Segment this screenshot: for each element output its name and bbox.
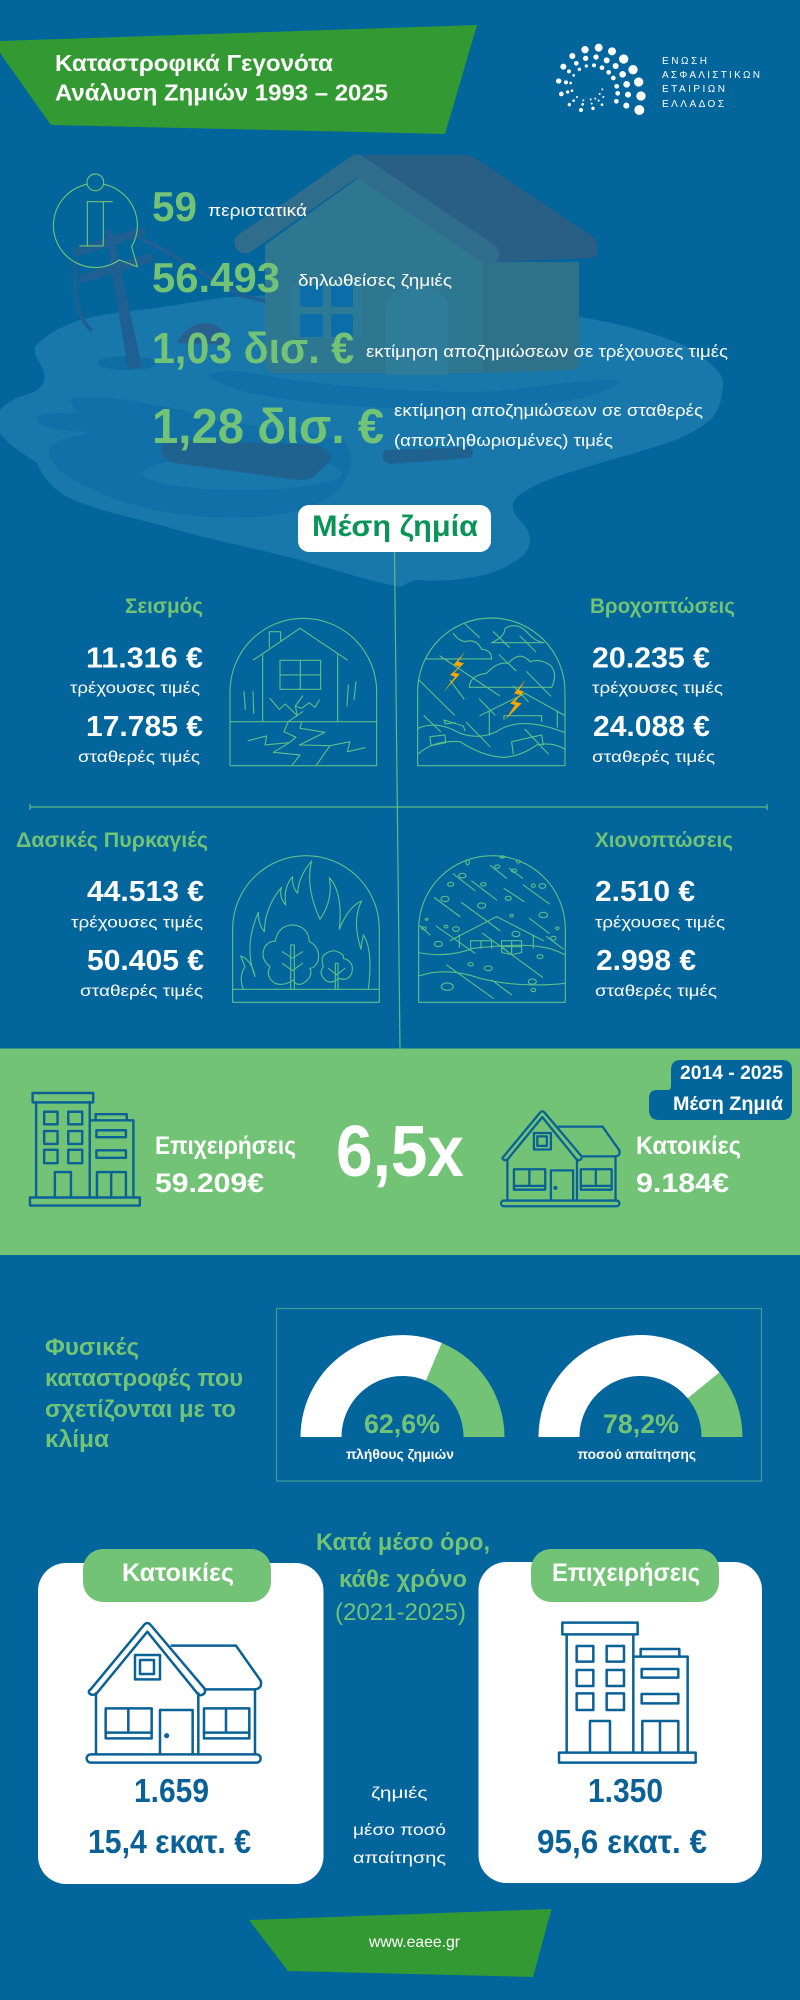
stat: incidents: περιστατικά — [208, 202, 308, 220]
central row labels: απαίτησης — [353, 1850, 446, 1867]
icon: storm over house — [418, 618, 565, 766]
businesses figures — [537, 1772, 707, 1860]
icon: office building — [30, 1093, 140, 1206]
climate heading: Φυσικές — [45, 1334, 139, 1361]
stat: incidents — [152, 183, 308, 230]
rainfall figures: σταθερές τιμές — [592, 749, 715, 766]
stat: constant prices — [152, 400, 703, 454]
card: households — [38, 1549, 324, 1884]
heading: average damage: Μέση ζημία — [312, 510, 479, 543]
households pill: Κατοικίες — [122, 1559, 234, 1587]
house — [245, 155, 597, 375]
icon: info speech bubble — [53, 174, 137, 267]
climate heading: κλίμα — [45, 1426, 109, 1453]
gauge: claims count: πλήθους ζημιών — [346, 1446, 454, 1462]
rainfall figures — [592, 642, 723, 766]
snowfall figures: 2.510 € — [595, 876, 695, 908]
business label — [155, 1132, 296, 1198]
central row labels: μέσο ποσό — [353, 1822, 446, 1839]
stat: reported claims: δηλωθείσες ζημιές — [298, 272, 452, 290]
inner water lobe — [207, 371, 620, 409]
gauge: claim amount: 78,2% — [603, 1409, 679, 1439]
snowfall heading: Χιονοπτώσεις — [595, 829, 733, 852]
forest fires figures: 44.513 € — [87, 876, 204, 908]
title text: Ανάλυση Ζημιών 1993 – 2025 — [55, 80, 388, 106]
card: businesses — [478, 1549, 762, 1883]
icon: large house — [87, 1623, 261, 1763]
stat: current prices: εκτίμηση αποζημιώσεων σε τρέχουσες τιμές — [366, 343, 728, 361]
rainfall figures: 20.235 € — [592, 642, 710, 674]
gauge: claims count: 62,6% — [364, 1409, 440, 1439]
forest fires figures: τρέχουσες τιμές — [71, 914, 203, 932]
households card background — [38, 1563, 324, 1884]
rainfall figures: 24.088 € — [593, 711, 710, 743]
title banner — [0, 25, 477, 134]
panel: rainfall — [418, 595, 735, 766]
utility pole — [75, 229, 295, 370]
gauge: claim amount: ποσού απαίτησης — [578, 1446, 696, 1462]
period badge: Μέση Ζημιά — [673, 1094, 783, 1115]
stat: constant prices: (αποπληθωρισμένες) τιμές — [394, 432, 613, 450]
icon: house — [501, 1111, 620, 1206]
headline statistics — [152, 183, 728, 454]
multiplier: 6,5x — [336, 1112, 464, 1192]
stat: reported claims: 56.493 — [152, 254, 280, 301]
stat: incidents: 59 — [152, 183, 197, 230]
businesses pill — [531, 1549, 719, 1602]
logo text: ΑΣΦΑΛΙΣΤΙΚΩΝ — [662, 70, 760, 81]
gauge: claim amount — [538, 1335, 742, 1462]
icon: snowstorm over house — [419, 856, 565, 1002]
earthquake figures: τρέχουσες τιμές — [70, 680, 200, 697]
stat: constant prices: 1,28 δισ. € — [152, 400, 384, 454]
forest fires figures: σταθερές τιμές — [80, 983, 203, 1000]
ripple around log — [143, 456, 343, 490]
icon: large building — [559, 1623, 696, 1763]
forest fires heading: Δασικές Πυρκαγιές — [16, 829, 208, 852]
panel: forest fires — [16, 829, 379, 1002]
title text: Καταστροφικά Γεγονότα — [55, 50, 333, 76]
heading: yearly average: κάθε χρόνο — [339, 1566, 467, 1593]
icon: burning trees — [233, 856, 379, 1002]
households figures: 1.659 — [134, 1772, 209, 1809]
heading: yearly average — [316, 1529, 490, 1626]
heading: yearly average: (2021-2025) — [335, 1599, 466, 1626]
earthquake figures: 11.316 € — [86, 642, 203, 674]
panel: climate gauges — [276, 1308, 762, 1481]
earthquake figures: 17.785 € — [86, 711, 203, 743]
rainfall figures: τρέχουσες τιμές — [592, 680, 723, 697]
climate heading: καταστροφές που — [45, 1365, 243, 1392]
household label: Κατοικίες — [636, 1132, 741, 1160]
period badge: 2014 - 2025 — [680, 1063, 783, 1084]
heading: yearly average: Κατά μέσο όρο, — [316, 1529, 490, 1556]
snowfall figures — [595, 876, 725, 1000]
band background — [0, 1048, 800, 1255]
logo text: ΕΛΛΑΔΟΣ — [662, 99, 724, 110]
snowfall figures: 2.998 € — [596, 945, 696, 977]
logo text: ΕΝΩΣΗ — [662, 56, 707, 67]
central row labels: ζημιές — [371, 1785, 428, 1802]
icon: lightning bolts — [443, 651, 526, 720]
earthquake figures: σταθερές τιμές — [78, 749, 200, 766]
central row labels — [353, 1785, 446, 1867]
climate heading: σχετίζονται με το — [45, 1396, 236, 1423]
gauges frame — [276, 1308, 762, 1481]
quadrant divider lines — [30, 552, 767, 1049]
floating debris — [382, 447, 473, 464]
forest fires figures — [71, 876, 204, 1000]
climate heading — [45, 1334, 243, 1453]
stat: current prices — [152, 324, 728, 373]
floating log — [161, 440, 331, 480]
business label: Επιχειρήσεις — [155, 1132, 296, 1160]
forest fires figures: 50.405 € — [87, 945, 204, 977]
gauge: claims count — [300, 1335, 504, 1462]
inner water shade — [37, 397, 350, 518]
rainfall heading: Βροχοπτώσεις — [590, 595, 735, 618]
business label: 59.209€ — [155, 1168, 264, 1198]
households figures — [88, 1772, 251, 1860]
stat: current prices: 1,03 δισ. € — [152, 324, 354, 373]
submerged dome — [177, 323, 232, 345]
logo text: ΕΤΑΙΡΙΩΝ — [662, 84, 725, 95]
panel: earthquake — [70, 595, 377, 766]
households figures: 15,4 εκατ. € — [88, 1823, 251, 1860]
earthquake heading: Σεισμός — [125, 595, 203, 618]
footer banner — [249, 1909, 552, 1977]
heading: average damage — [298, 505, 491, 552]
logo dots — [556, 44, 646, 115]
panel: snowfall — [419, 829, 733, 1002]
logo: organisation mark and name — [556, 44, 760, 115]
businesses figures: 1.350 — [588, 1772, 663, 1809]
icon: earthquake house — [230, 618, 377, 766]
businesses figures: 95,6 εκατ. € — [537, 1823, 707, 1860]
household label — [636, 1132, 741, 1198]
period badge — [649, 1060, 792, 1120]
businesses pill: Επιχειρήσεις — [552, 1559, 700, 1587]
stat: reported claims — [152, 254, 452, 301]
stat: constant prices: εκτίμηση αποζημιώσεων σε σταθερές — [394, 402, 703, 420]
earthquake figures — [70, 642, 203, 766]
flood illustration background — [0, 155, 723, 587]
panel: business vs household band — [0, 1048, 800, 1255]
logo text — [662, 56, 760, 110]
water pool — [0, 290, 723, 587]
snowfall figures: σταθερές τιμές — [595, 983, 717, 1000]
household label: 9.184€ — [636, 1168, 729, 1198]
title text — [55, 50, 388, 106]
website: www.eaee.gr — [368, 1934, 461, 1951]
snowfall figures: τρέχουσες τιμές — [595, 914, 725, 932]
businesses card background — [478, 1562, 762, 1883]
households pill — [83, 1549, 271, 1602]
